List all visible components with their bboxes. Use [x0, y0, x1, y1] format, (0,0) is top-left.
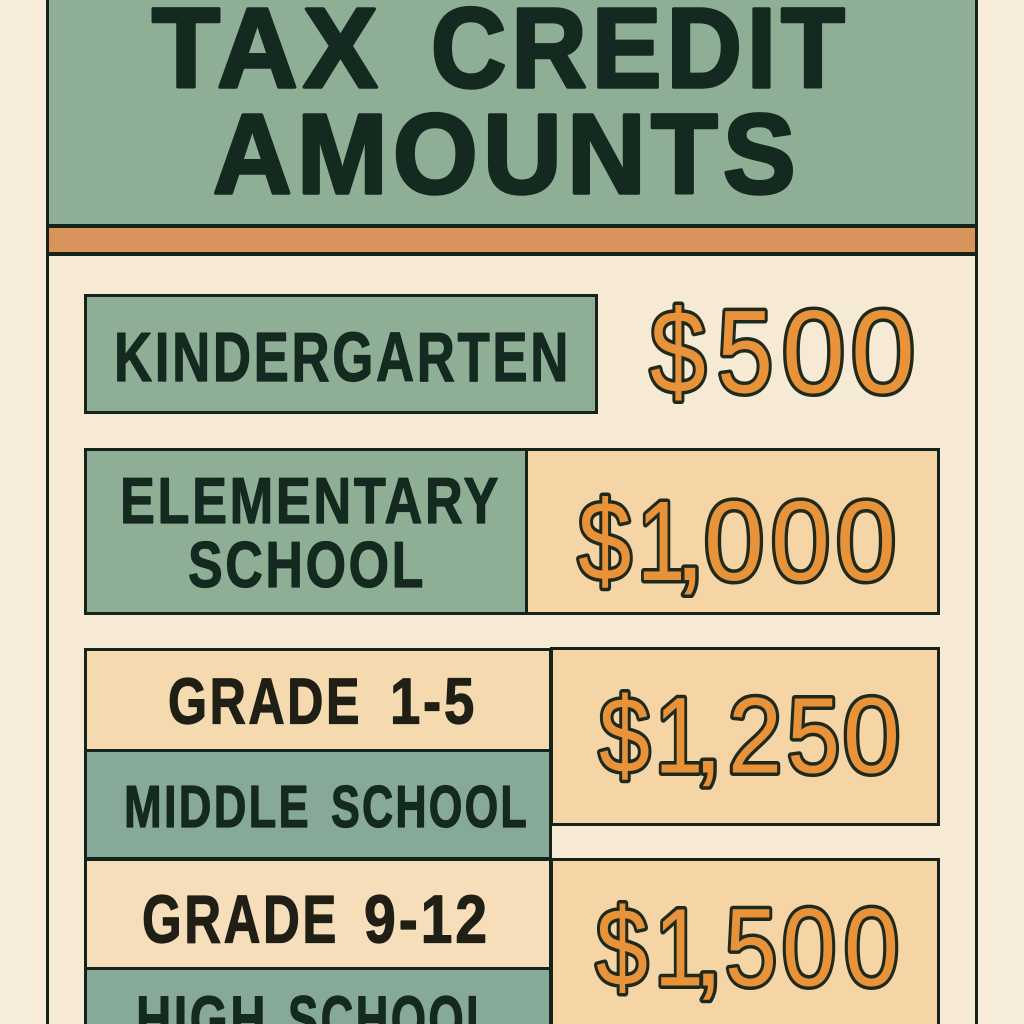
label: elementary school	[86, 450, 526, 614]
amount: $1,250: 0	[843, 674, 900, 796]
label: elementary school: SCHOOL	[188, 528, 426, 601]
row: elementary school	[86, 450, 938, 614]
amount: $1,250	[552, 648, 938, 824]
amount: $500: 5	[717, 286, 773, 418]
amount: $1,500: 0	[782, 886, 836, 1010]
title: AMOUNTS	[213, 91, 801, 217]
title	[152, 0, 850, 217]
label: elementary school: ELEMENTARY	[120, 464, 501, 537]
label: high school	[86, 968, 550, 1024]
amount: $1,250: 2	[728, 674, 782, 796]
amount: $500: 0	[782, 286, 845, 418]
label: grade 9-12: 9-12	[364, 882, 490, 958]
label: grade 9-12: GRADE	[142, 882, 339, 958]
amount: $1,500: $	[596, 886, 648, 1010]
amount: $1,500: 0	[844, 886, 899, 1010]
amount: $1,000: 0	[836, 478, 896, 604]
orange stripe	[49, 226, 975, 254]
label: middle school: MIDDLE	[124, 774, 311, 840]
row: grade 1-5 and middle school	[86, 648, 938, 858]
amount: $1,000: 0	[704, 478, 764, 604]
amount: $1,500	[552, 860, 938, 1024]
amount: $1,500: 1	[654, 886, 704, 1010]
amount: $500: 0	[851, 286, 915, 418]
amount: $1,250: ,	[693, 674, 723, 796]
amount: $1,000: ,	[674, 478, 705, 604]
label: grade 1-5: 1-5	[390, 664, 477, 738]
label: grade 1-5	[86, 650, 550, 750]
label: grade 9-12	[86, 860, 550, 968]
amount: $1,000: 1	[637, 478, 687, 604]
amount: $1,500: 5	[725, 886, 777, 1010]
amount: $1,500: ,	[693, 886, 724, 1010]
amount: $1,250: $	[599, 674, 650, 796]
amount: $1,250: 5	[787, 674, 840, 796]
label: kindergarten: KINDERGARTEN	[114, 318, 571, 396]
amount: $500: $	[650, 286, 706, 418]
label: grade 1-5: GRADE	[168, 664, 362, 738]
amount: $1,000: 0	[771, 478, 830, 604]
row: kindergarten	[86, 286, 915, 418]
label: middle school	[86, 750, 550, 858]
header band	[49, 0, 975, 224]
amount: $1,000: $	[578, 478, 631, 604]
row: grade 9-12 and high school	[86, 860, 938, 1024]
amount: $1,000	[526, 450, 938, 614]
label: middle school: SCHOOL	[331, 774, 529, 840]
label: kindergarten	[86, 296, 596, 412]
amount: $1,250: 1	[655, 674, 703, 796]
